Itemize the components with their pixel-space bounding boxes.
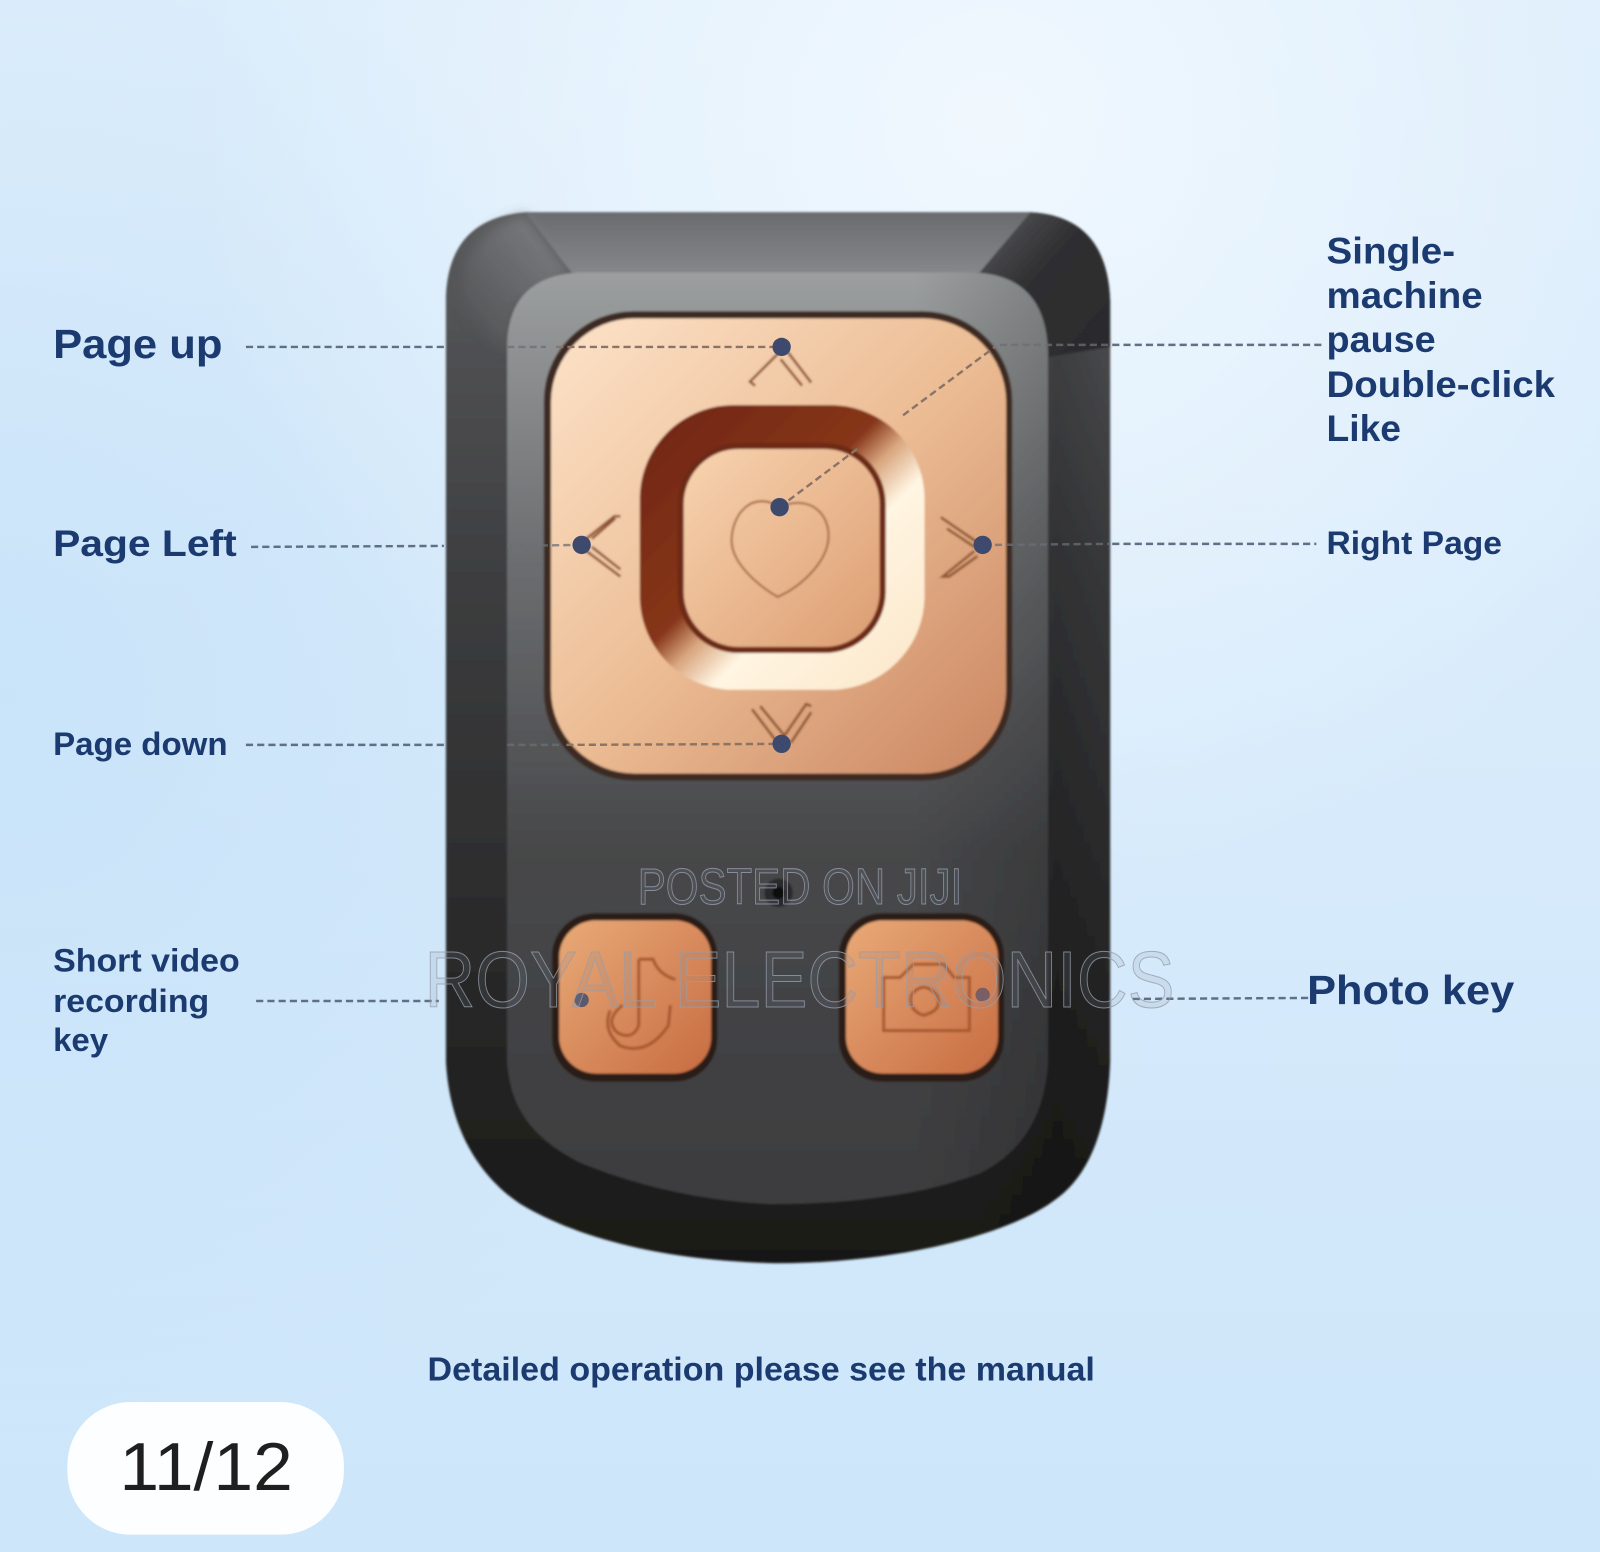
device top-left corner highlight bbox=[459, 214, 571, 352]
icon: down chevrons bbox=[752, 704, 811, 743]
icon: up chevrons bbox=[750, 352, 811, 386]
label: short video recording key: recording bbox=[53, 982, 209, 1019]
page counter pill bbox=[67, 1402, 344, 1535]
center heart button bbox=[678, 443, 886, 653]
device body bbox=[446, 212, 1110, 1263]
icon: right chevrons bbox=[941, 517, 980, 577]
device top bevel bbox=[526, 212, 1031, 272]
hotspot dots bbox=[572, 338, 992, 1007]
label: short video recording key: Short video bbox=[53, 941, 240, 978]
remote control device bbox=[446, 212, 1110, 1263]
label: single-machine pause double-click like: machine bbox=[1327, 275, 1483, 316]
icon: music note bbox=[608, 959, 676, 1048]
watermark: royal electronics: ROYAL ELECTRONICS bbox=[424, 935, 1174, 1024]
leader lines bbox=[246, 345, 1321, 1001]
label: single-machine pause double-click like: Like bbox=[1327, 408, 1401, 449]
photo button bbox=[839, 913, 1004, 1082]
label: short video recording key: key bbox=[53, 1021, 108, 1058]
device right side shade bbox=[446, 212, 1110, 1263]
label: single-machine pause double-click like: Double-click bbox=[1327, 364, 1556, 405]
page counter pill: 11/12 bbox=[119, 1430, 293, 1505]
short video button bbox=[552, 913, 717, 1082]
camera hole bbox=[764, 879, 793, 907]
label: page left: Page Left bbox=[53, 523, 237, 564]
label: right page: Right Page bbox=[1327, 524, 1502, 561]
device top-right corner shade bbox=[980, 212, 1110, 357]
device inner panel bbox=[507, 272, 1048, 1204]
label: page up: Page up bbox=[53, 321, 222, 367]
watermark: posted on jiji: POSTED ON JIJI bbox=[638, 858, 962, 915]
label: photo key: Photo key bbox=[1307, 967, 1515, 1013]
center ring bbox=[640, 405, 924, 690]
label: single-machine pause double-click like: pause bbox=[1327, 319, 1436, 360]
label: single-machine pause double-click like: Single- bbox=[1327, 230, 1455, 271]
label: page down: Page down bbox=[53, 725, 228, 762]
footnote: Detailed operation please see the manual bbox=[428, 1352, 1095, 1389]
label: short video recording key bbox=[53, 941, 240, 1058]
copper d-pad plate bbox=[544, 311, 1012, 781]
label: single-machine pause double-click like bbox=[1327, 230, 1556, 449]
icon: heart bbox=[732, 501, 829, 597]
icon: left chevrons bbox=[584, 516, 620, 577]
icon: camera bbox=[884, 964, 969, 1031]
